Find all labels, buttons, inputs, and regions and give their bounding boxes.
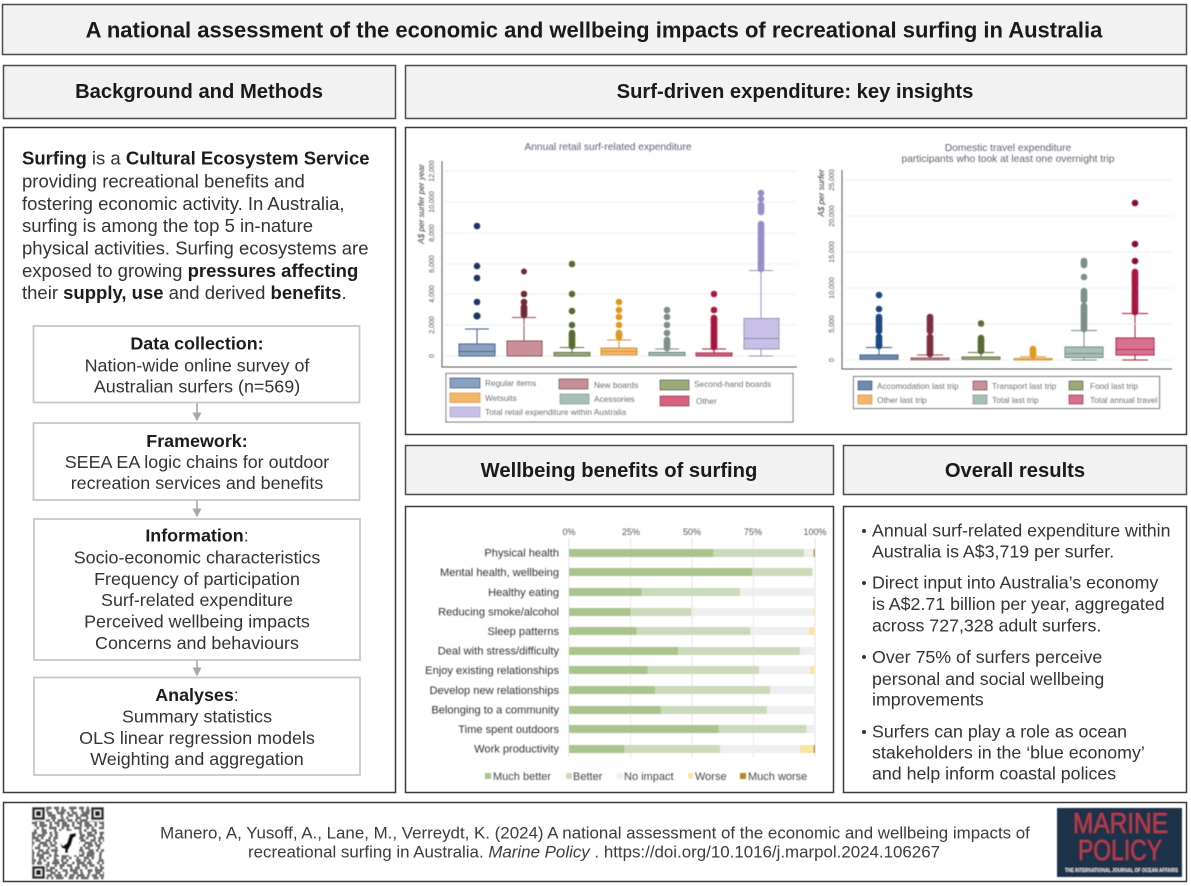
text block: introduction: Surfing is a Cultural Ecosystem Service <box>22 148 370 168</box>
icon: Marine Policy journal cover: POLICY <box>1078 835 1162 867</box>
chart: annual retail surf-related expenditure <box>417 142 797 422</box>
chart: stacked bars of wellbeing impacts <box>425 527 827 783</box>
box: data collection <box>34 326 360 402</box>
chart: stacked bars of wellbeing impacts: Deal with stress/difficulty <box>438 646 559 658</box>
box: information: Frequency of participation <box>94 569 300 589</box>
box: information: Concerns and behaviours <box>95 633 299 653</box>
box: information: Socio-economic characteristics <box>74 548 320 568</box>
legend: retail expenditure: Other <box>696 396 717 406</box>
text block: introduction: exposed to growing pressures affecting <box>22 260 358 281</box>
bullet: perceived improvements <box>862 647 1104 710</box>
box: analyses: Analyses: <box>155 685 239 705</box>
chart: stacked bars of wellbeing impacts: 75% <box>744 527 762 537</box>
chart: stacked bars of wellbeing impacts: Belonging to a community <box>431 704 559 716</box>
chart: stacked bars of wellbeing impacts: Reducing smoke/alcohol <box>438 606 559 618</box>
chart: stacked bars of wellbeing impacts: 100% <box>803 527 827 537</box>
arrow: information to analyses <box>192 660 202 676</box>
chart: stacked bars of wellbeing impacts: Time spent outdoors <box>458 724 559 736</box>
text block: citation <box>160 824 1030 862</box>
text block: introduction <box>22 148 370 303</box>
box plot: transport last trip <box>911 317 949 360</box>
chart: domestic travel expenditure: A$ per surfer <box>817 169 826 218</box>
chart: domestic travel expenditure: 20,000 <box>829 205 836 227</box>
chart: stacked bars of wellbeing impacts: Mental health, wellbeing <box>440 567 559 579</box>
bullet: ocean stakeholders: and help inform coastal polices <box>872 764 1116 784</box>
panel: background and methods <box>4 128 396 792</box>
icon: Marine Policy journal cover <box>1057 808 1182 877</box>
chart: domestic travel expenditure: 15,000 <box>829 241 836 263</box>
bullet: annual expenditure: Annual surf-related expenditure within <box>872 520 1171 540</box>
text block: citation: Manero, A, Yusoff, A., Lane, M., Verreydt, K. (2024) A national assessment of the economic and wellbeing impacts of <box>160 824 1030 842</box>
chart: stacked bars of wellbeing impacts: 50% <box>683 527 701 537</box>
arrow: framework to information <box>192 500 202 518</box>
box: data collection: Data collection: <box>130 334 264 354</box>
arrow: data collection to framework <box>192 403 202 422</box>
legend: travel expenditure: Total last trip <box>992 395 1039 405</box>
chart: stacked bars of wellbeing impacts: Healthy eating <box>488 587 559 599</box>
bullet: perceived improvements: personal and social wellbeing <box>872 669 1104 689</box>
chart: annual retail surf-related expenditure: 4,000 <box>429 285 436 303</box>
text block: introduction: providing recreational benefits and <box>22 170 305 192</box>
chart: domestic travel expenditure: 0 <box>829 358 836 362</box>
heading: background and methods <box>4 66 396 118</box>
legend: travel expenditure <box>854 376 1160 408</box>
bullet: ocean stakeholders: stakeholders in the ‘blue economy’ <box>872 742 1145 762</box>
bullet: ocean stakeholders <box>862 722 1145 784</box>
box: information <box>34 519 360 660</box>
bullet: direct input: across 727,328 adult surfers. <box>872 616 1101 636</box>
heading: overall results: Overall results <box>945 460 1085 482</box>
legend: retail expenditure: Wetsuits <box>485 393 517 403</box>
box plot: total annual travel <box>1116 200 1154 360</box>
icon: Marine Policy journal cover: THE INTERNATIONAL JOURNAL OF OCEAN AFFAIRS <box>1065 868 1179 874</box>
chart: domestic travel expenditure: 5,000 <box>829 315 836 333</box>
panel: overall results <box>844 506 1186 792</box>
text block: introduction: surfing is among the top 5 in-nature <box>22 215 313 236</box>
legend: travel expenditure: Total annual travel <box>1090 395 1157 405</box>
box: analyses <box>34 678 360 775</box>
chart: annual retail surf-related expenditure: 8,000 <box>429 224 436 242</box>
legend: travel expenditure: Food last trip <box>1090 381 1138 391</box>
box: information: Surf-related expenditure <box>101 590 293 610</box>
title <box>2 4 1186 54</box>
bullet: direct input: Direct input into Australia’s economy <box>872 572 1158 592</box>
bullet: direct input: is A$2.71 billion per year, aggregated <box>872 594 1165 614</box>
legend: retail expenditure: Total retail expenditure within Australia <box>485 407 627 417</box>
box plot: second-hand boards <box>554 261 590 356</box>
bullet: annual expenditure: Australia is A$3,719 per surfer. <box>872 542 1114 562</box>
panel: wellbeing benefits chart <box>406 506 834 792</box>
legend: retail expenditure: Acessories <box>594 394 635 404</box>
text block: introduction: physical activities. Surfing ecosystems are <box>22 238 368 258</box>
heading: surf-driven expenditure <box>406 66 1186 118</box>
box: analyses: Summary statistics <box>122 706 272 726</box>
chart: stacked bars of wellbeing impacts: Enjoy existing relationships <box>425 665 559 677</box>
chart: annual retail surf-related expenditure: Annual retail surf-related expenditure <box>524 142 692 153</box>
box plot: other <box>696 291 732 356</box>
legend: wellbeing impact scale: No impact <box>624 771 674 783</box>
panel: footer citation <box>4 802 1186 882</box>
icon: Marine Policy journal cover: MARINE <box>1073 808 1168 840</box>
legend: travel expenditure: Transport last trip <box>992 381 1057 391</box>
icon: QR code <box>31 806 105 880</box>
title: A national assessment of the economic and wellbeing impacts of recreational surfing in Australia <box>86 18 1103 42</box>
text block: citation: recreational surfing in Australia. Marine Policy . https://doi.org/10.1016/j.marpol.2024.106267 <box>248 842 940 862</box>
legend: retail expenditure: Regular items <box>485 378 536 388</box>
box: analyses: OLS linear regression models <box>79 728 315 748</box>
legend: wellbeing impact scale: Much worse <box>748 771 807 783</box>
heading: overall results <box>844 446 1186 494</box>
box: information: Perceived wellbeing impacts <box>84 612 310 632</box>
heading: wellbeing benefits: Wellbeing benefits of surfing <box>481 460 757 482</box>
legend: retail expenditure: Second-hand boards <box>694 379 771 389</box>
bullet: annual expenditure <box>862 520 1171 562</box>
legend: wellbeing impact scale: Better <box>573 771 603 783</box>
legend: travel expenditure: Accomodation last trip <box>877 381 959 391</box>
chart: domestic travel expenditure: participants who took at least one overnight trip <box>902 154 1115 165</box>
box plot: new boards <box>507 268 542 356</box>
chart: annual retail surf-related expenditure: 2,000 <box>429 316 436 334</box>
legend: retail expenditure: New boards <box>594 380 638 390</box>
legend: wellbeing impact scale: Worse <box>695 771 727 783</box>
box: framework <box>34 423 360 500</box>
box: framework: recreation services and benefits <box>71 473 323 493</box>
chart: domestic travel expenditure: Domestic travel expenditure <box>945 143 1071 154</box>
bullet: perceived improvements: Over 75% of surfers perceive <box>872 647 1102 667</box>
box plot: wetsuits <box>601 299 637 355</box>
heading: background and methods: Background and Methods <box>75 81 323 103</box>
panel: expenditure charts <box>406 128 1186 434</box>
bullet: perceived improvements: improvements <box>872 690 984 710</box>
box plot: accommodation last trip <box>860 292 898 360</box>
chart: annual retail surf-related expenditure: A$ per surfer per year <box>417 164 426 245</box>
bullet: direct input <box>862 572 1165 636</box>
chart: stacked bars of wellbeing impacts: 0% <box>562 527 576 537</box>
box plot: food last trip <box>962 320 1000 360</box>
box plot: other last trip <box>1014 349 1052 360</box>
text block: introduction: fostering economic activity. In Australia, <box>22 193 345 214</box>
chart: domestic travel expenditure: 25,000 <box>829 169 836 191</box>
box: data collection: Australian surfers (n=569) <box>94 376 300 396</box>
chart: stacked bars of wellbeing impacts: Sleep patterns <box>487 626 559 638</box>
box: information: Information: <box>145 526 249 546</box>
chart: stacked bars of wellbeing impacts: Develop new relationships <box>429 685 559 697</box>
box: framework: Framework: <box>146 431 248 451</box>
box plot: accessories <box>649 307 685 356</box>
legend: retail expenditure <box>446 374 793 422</box>
box plot: total retail expenditure <box>744 190 779 356</box>
chart: annual retail surf-related expenditure: 0 <box>429 354 436 358</box>
heading: surf-driven expenditure: Surf-driven expenditure: key insights <box>617 81 973 103</box>
chart: domestic travel expenditure: 10,000 <box>829 277 836 299</box>
text block: introduction: their supply, use and derived benefits. <box>22 282 347 303</box>
box plot: total last trip <box>1065 261 1103 360</box>
chart: annual retail surf-related expenditure: 6,000 <box>429 255 436 273</box>
chart: annual retail surf-related expenditure: 10,000 <box>429 191 436 213</box>
bullet: ocean stakeholders: Surfers can play a role as ocean <box>872 722 1127 742</box>
chart: domestic travel expenditure <box>817 143 1172 408</box>
legend: wellbeing impact scale: Much better <box>493 771 551 783</box>
box: data collection: Nation-wide online survey of <box>85 356 309 376</box>
legend: wellbeing impact scale <box>485 771 807 783</box>
heading: wellbeing benefits <box>406 446 834 494</box>
chart: stacked bars of wellbeing impacts: 25% <box>622 527 640 537</box>
chart: stacked bars of wellbeing impacts: Work productivity <box>474 744 559 756</box>
chart: stacked bars of wellbeing impacts: Physical health <box>484 548 559 560</box>
chart: annual retail surf-related expenditure: 12,000 <box>429 160 436 182</box>
box: analyses: Weighting and aggregation <box>90 749 304 769</box>
box: framework: SEEA EA logic chains for outdoor <box>65 452 329 472</box>
box plot: regular items <box>459 223 495 356</box>
legend: travel expenditure: Other last trip <box>877 395 927 405</box>
